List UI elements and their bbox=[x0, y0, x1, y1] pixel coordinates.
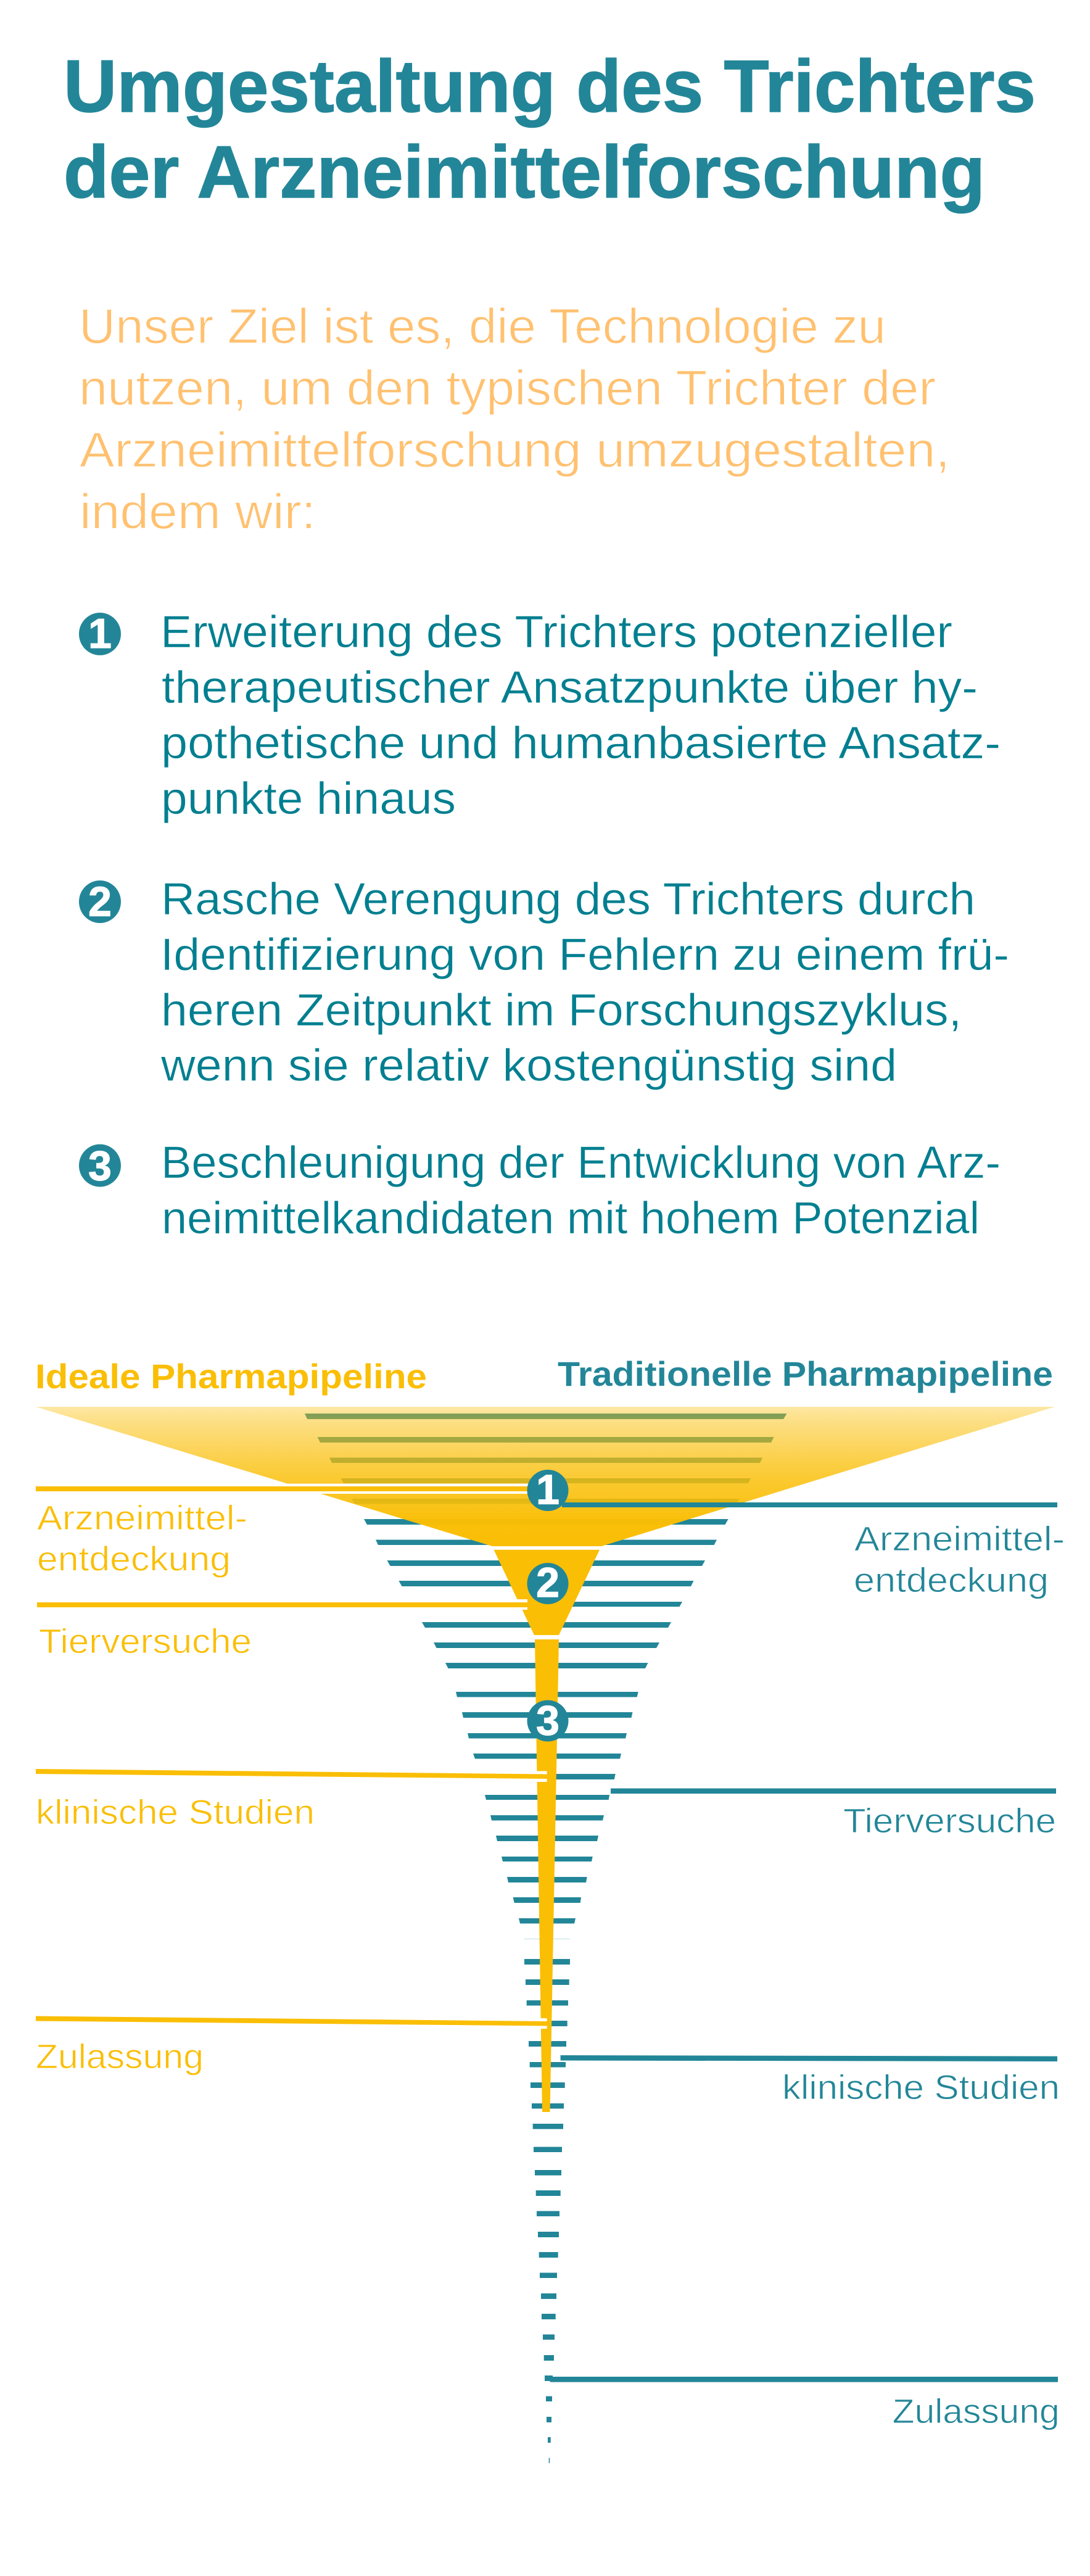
title: Umgestaltung des Trichters bbox=[64, 45, 1036, 128]
label: Zulassung (ideal): Zulassung bbox=[36, 2037, 204, 2076]
intro text block: Unser Ziel ist es, die Technologie zu bbox=[79, 299, 886, 354]
label: Arzneimittelentdeckung (ideal): Arzneimittel- bbox=[37, 1498, 247, 1537]
teal connector lines bbox=[550, 1502, 1058, 2382]
list item 3 text bbox=[161, 1138, 1001, 1243]
list item 3 bbox=[79, 1138, 1001, 1243]
funnel chart bbox=[35, 1354, 1065, 2463]
intro text block bbox=[79, 299, 950, 539]
list item 2 text bbox=[160, 874, 1009, 1091]
list item 2 bbox=[79, 874, 1009, 1091]
list item 2 text: Rasche Verengung des Trichters durch bbox=[161, 874, 975, 924]
list item 1 text bbox=[160, 607, 1001, 824]
icon: number 3 badge: 3 bbox=[88, 1143, 112, 1190]
label: klinische Studien (traditional): klinische Studien bbox=[782, 2068, 1060, 2106]
label: Tierversuche (traditional): Tierversuche bbox=[843, 1801, 1056, 1840]
intro text block: nutzen, um den typischen Trichter der bbox=[79, 360, 936, 415]
list item 1 text: therapeutischer Ansatzpunkte über hy- bbox=[162, 663, 978, 713]
icon: funnel marker 3 bbox=[527, 1697, 569, 1744]
icon: funnel marker 2 bbox=[527, 1559, 569, 1606]
yellow connector lines bbox=[36, 1486, 547, 2026]
heading: traditional pipeline: Traditionelle Pharmapipeline bbox=[558, 1354, 1053, 1393]
label: Arzneimittelentdeckung (ideal): entdeckung bbox=[37, 1539, 231, 1578]
title: der Arzneimittelforschung bbox=[64, 131, 985, 213]
icon: funnel marker 3: 3 bbox=[536, 1697, 559, 1744]
list item 2 text: Identifizierung von Fehlern zu einem frü- bbox=[160, 930, 1009, 980]
label: Arzneimittelentdeckung (traditional): Arzneimittel- bbox=[854, 1519, 1065, 1558]
list item 1 text: punkte hinaus bbox=[161, 774, 456, 824]
numbered list bbox=[79, 607, 1009, 1243]
list item 1 text: pothetische und humanbasierte Ansatz- bbox=[161, 718, 1001, 768]
list item 3 text: Beschleunigung der Entwicklung von Arz- bbox=[161, 1138, 1001, 1188]
traditional pipeline funnel bars bbox=[305, 1414, 787, 2463]
list item 2 text: heren Zeitpunkt im Forschungszyklus, bbox=[161, 985, 962, 1035]
label: Zulassung (traditional): Zulassung bbox=[893, 2392, 1060, 2430]
label: klinische Studien (ideal): klinische Studien bbox=[36, 1792, 315, 1831]
icon: funnel marker 2: 2 bbox=[536, 1559, 559, 1606]
icon: number 1 badge: 1 bbox=[88, 610, 112, 657]
list item 2 text: wenn sie relativ kostengünstig sind bbox=[160, 1040, 897, 1091]
label: Arzneimittelentdeckung (traditional): entdeckung bbox=[854, 1560, 1049, 1599]
list item 3 text: neimittelkandidaten mit hohem Potenzial bbox=[162, 1193, 980, 1243]
intro text block: indem wir: bbox=[80, 484, 316, 539]
title bbox=[64, 45, 1036, 213]
icon: funnel marker 1: 1 bbox=[536, 1466, 559, 1513]
icon: number 2 badge bbox=[79, 879, 121, 926]
icon: number 3 badge bbox=[79, 1143, 121, 1190]
label: Tierversuche (ideal): Tierversuche bbox=[39, 1621, 252, 1660]
list item 1 text: Erweiterung des Trichters potenzieller bbox=[160, 607, 952, 657]
intro text block: Arzneimittelforschung umzugestalten, bbox=[80, 422, 950, 478]
heading: ideal pipeline: Ideale Pharmapipeline bbox=[35, 1357, 427, 1396]
icon: number 2 badge: 2 bbox=[88, 879, 112, 926]
list item 1 bbox=[79, 607, 1001, 824]
icon: funnel marker 1 bbox=[527, 1466, 569, 1513]
label: Arzneimittelentdeckung (ideal) bbox=[37, 1498, 247, 1578]
ideal pipeline funnel bbox=[36, 1407, 1055, 2112]
label: Arzneimittelentdeckung (traditional) bbox=[854, 1519, 1065, 1599]
icon: number 1 badge bbox=[79, 610, 121, 657]
